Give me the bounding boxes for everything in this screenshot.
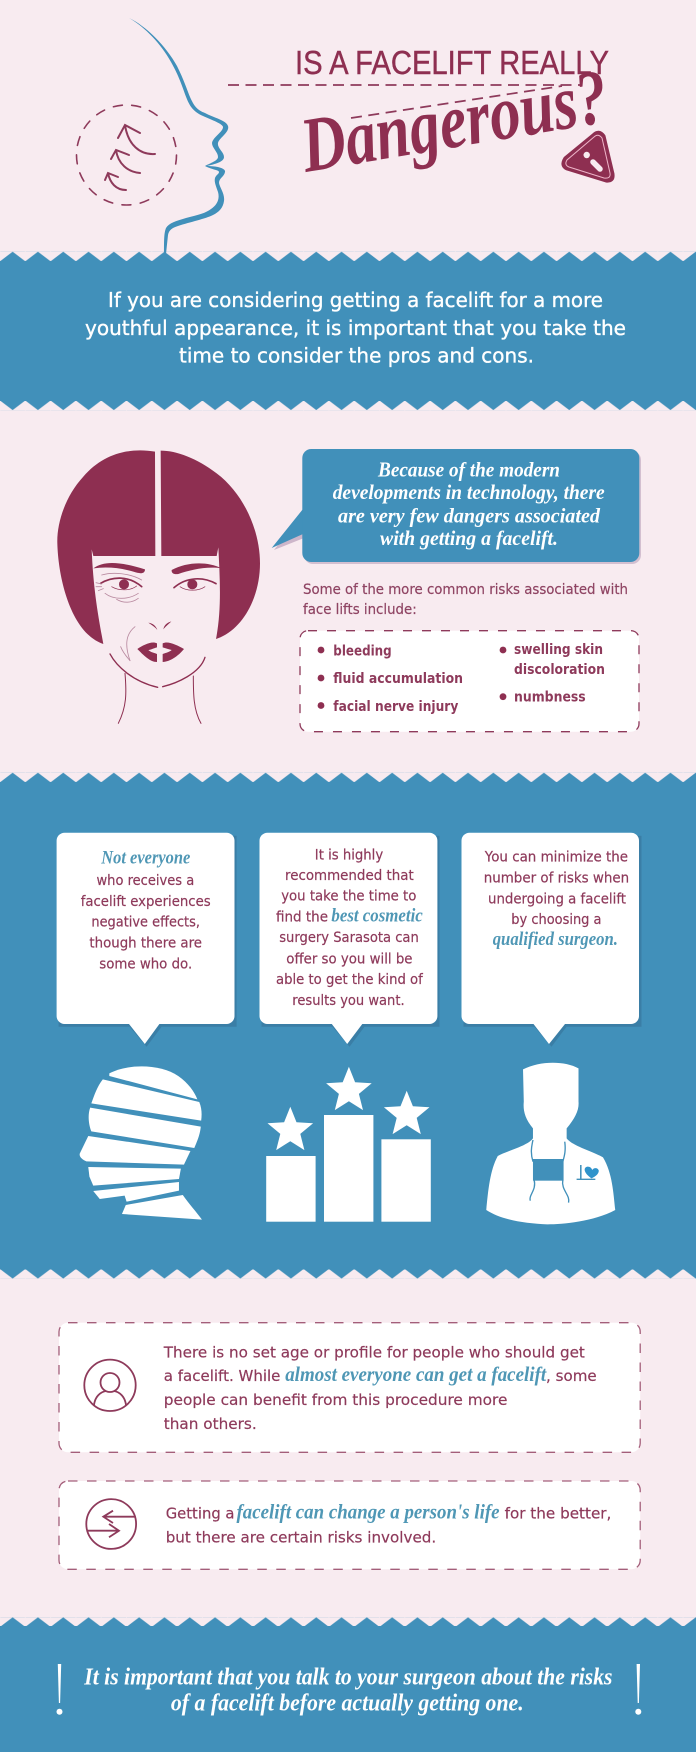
panel: facelift can change a life: for the better, [505, 1504, 611, 1522]
panel: who should get a facelift [59, 1323, 640, 1452]
band: closing [0, 1617, 696, 1752]
panel: facelift can change a life: Getting a [166, 1504, 234, 1522]
card: qualified surgeon: You can minimize the [484, 850, 628, 866]
card: best cosmetic surgery: results you want. [292, 993, 405, 1009]
title: Is a facelift really: IS A FACELIFT REALLY [295, 44, 609, 81]
panel: who should get a facelift: a facelift. While [164, 1367, 280, 1385]
hair [57, 450, 260, 662]
card: best cosmetic surgery: surgery Sarasota can [279, 930, 419, 946]
intro text [85, 288, 626, 368]
card: best cosmetic surgery: best cosmetic [331, 905, 423, 926]
intro text: If you are considering getting a facelift for a more [108, 288, 603, 312]
card: best cosmetic surgery [260, 833, 440, 1047]
panel: risks list: facial nerve injury [333, 699, 458, 715]
card: not everyone: who receives a [96, 873, 194, 889]
icon: person in circle [84, 1360, 136, 1411]
icon: exchange arrows in circle [86, 1499, 136, 1549]
icon: bandaged head [80, 1066, 202, 1220]
panel: risks list: fluid accumulation [333, 671, 463, 687]
callout: modern developments: Because of the modern [377, 458, 560, 482]
callout: modern developments: are very few dangers associated [338, 504, 601, 528]
card: not everyone: facelift experiences [81, 894, 211, 910]
card: best cosmetic surgery: recommended that [285, 868, 414, 884]
wrinkles and contours [110, 654, 205, 723]
card: not everyone [57, 833, 237, 1047]
panel: who should get a facelift: , some [546, 1367, 597, 1385]
panel: who should get a facelift: than others. [164, 1415, 257, 1433]
card: not everyone: some who do. [99, 956, 192, 972]
card: best cosmetic surgery: you take the time to [281, 889, 416, 905]
illustration: woman face [57, 450, 260, 723]
card: best cosmetic surgery: able to get the kind of [276, 972, 424, 988]
panel: risks list: numbness [514, 690, 586, 706]
card: qualified surgeon: undergoing a facelift [488, 891, 627, 907]
icon: face profile [129, 18, 228, 254]
icon: surgeon [486, 1063, 615, 1224]
band: tips [0, 773, 696, 1279]
panel: risks list: swelling skin [514, 642, 603, 658]
card: qualified surgeon: number of risks when [484, 870, 629, 886]
text: common risks intro [303, 582, 628, 618]
dashed title rules [228, 85, 582, 118]
icon: star rating bars [266, 1067, 431, 1222]
intro text: youthful appearance, it is important that you take the [85, 316, 626, 340]
panel: facelift can change a life: facelift can change a person's life [236, 1499, 500, 1523]
panel: who should get a facelift: almost everyone can get a facelift [285, 1362, 547, 1386]
card: qualified surgeon: by choosing a [511, 912, 602, 928]
panel: facelift can change a life: but there are certain risks involved. [166, 1528, 436, 1546]
card: not everyone: negative effects, [91, 915, 200, 931]
panel: who should get a facelift: There is no set age or profile for people who should get [163, 1343, 585, 1361]
icon: right exclamation mark [635, 1664, 641, 1715]
callout: modern developments: developments in technology, there [333, 480, 605, 504]
card: best cosmetic surgery: It is highly [315, 847, 383, 863]
panel: risks list [300, 631, 639, 732]
card: not everyone: though there are [89, 935, 202, 951]
intro text: time to consider the pros and cons. [179, 344, 534, 368]
text: common risks intro: face lifts include: [303, 602, 417, 618]
card: qualified surgeon: qualified surgeon. [493, 929, 618, 950]
icon: left exclamation mark [56, 1664, 62, 1715]
panel: risks list: discoloration [514, 662, 605, 678]
closing text: of a facelift before actually getting one. [171, 1691, 524, 1717]
icon: warning triangle [563, 132, 613, 181]
card: not everyone: Not everyone [100, 847, 191, 868]
card: best cosmetic surgery: offer so you will be [286, 951, 412, 967]
panel: risks list: bleeding [333, 644, 392, 660]
callout: modern developments: with getting a facelift. [380, 526, 558, 550]
closing text [83, 1664, 613, 1717]
eyes [101, 578, 216, 590]
band: intro [0, 252, 696, 410]
panel: who should get a facelift: people can benefit from this procedure more [164, 1391, 507, 1409]
closing text: It is important that you talk to your surgeon about the risks [83, 1664, 613, 1690]
callout: modern developments [272, 449, 641, 564]
card: qualified surgeon [462, 833, 642, 1047]
panel: facelift can change a life [59, 1481, 640, 1569]
title: Dangerous: Dangerous? [294, 52, 614, 189]
text: common risks intro: Some of the more common risks associated with [303, 582, 628, 598]
card: best cosmetic surgery: find the [276, 909, 328, 925]
icon: dashed circle with lift arrows [76, 105, 176, 205]
